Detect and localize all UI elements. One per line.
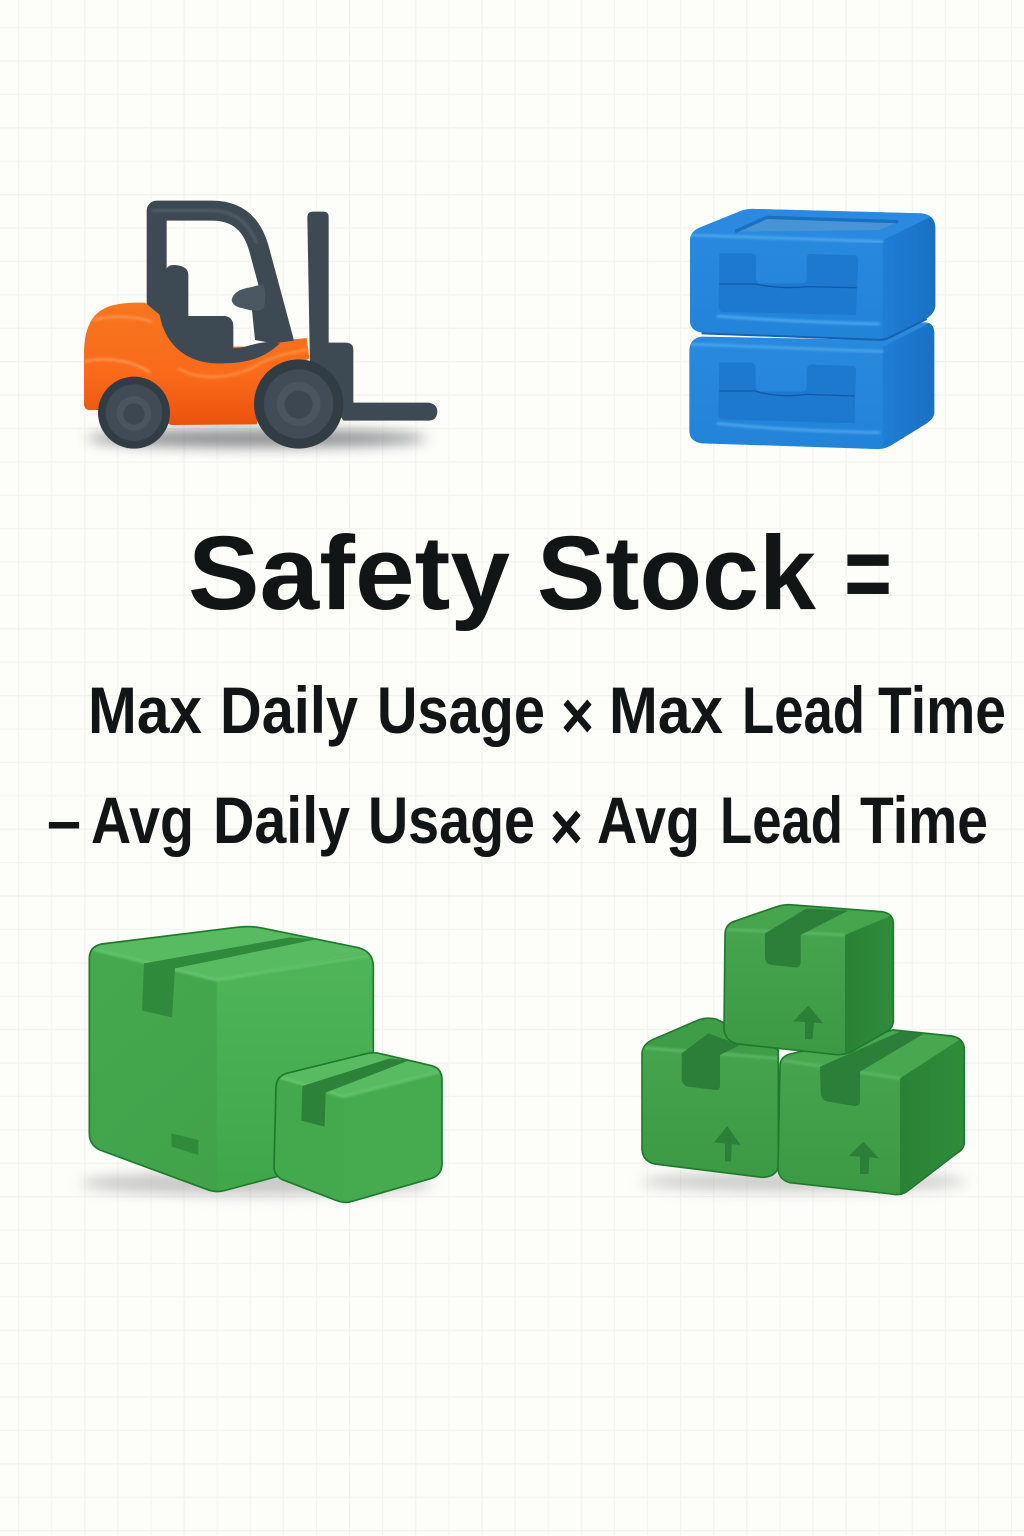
box shadow: [80, 1171, 433, 1195]
forklift orange body: [84, 303, 309, 425]
formula line 2: [47, 783, 988, 863]
forklift mast and fork: [307, 212, 437, 421]
formula line 1: Usage: [377, 673, 545, 747]
heading: Safety Stock =: [188, 515, 892, 632]
formula line 2: Daily: [213, 783, 350, 857]
heading: Safety Stock =: Stock: [537, 515, 817, 632]
forklift seat: [159, 265, 280, 363]
formula line 2: Lead: [720, 783, 843, 857]
icon: large and small green boxes: [80, 923, 443, 1207]
icon: forklift: [84, 211, 437, 449]
forklift front wheel: [254, 359, 343, 449]
formula line 2: Time: [860, 783, 988, 857]
formula line 2: Usage: [368, 783, 535, 857]
large box: [87, 923, 377, 1200]
shadow: [640, 1172, 967, 1192]
upper drawer unit: [690, 207, 937, 347]
formula line 2: Avg: [597, 783, 700, 857]
formula line 1: Daily: [220, 673, 358, 747]
left box: [640, 1017, 783, 1177]
formula line 1: ×: [561, 678, 594, 752]
forklift ground shadow: [87, 430, 427, 447]
formula line 1: Lead: [742, 673, 865, 747]
formula line 2: –: [47, 783, 81, 857]
lower drawer unit: [689, 321, 934, 453]
icon: blue stacked drawers: [689, 207, 937, 453]
forklift cab frame: [152, 211, 284, 342]
seam between drawers: [702, 319, 927, 340]
right box: [777, 1028, 967, 1200]
formula line 1: [88, 673, 1006, 752]
formula line 2: Avg: [91, 783, 194, 857]
heading: Safety Stock =: =: [844, 515, 892, 632]
top box: [723, 903, 895, 1057]
icon: pyramid of green boxes: [640, 903, 967, 1200]
forklift steering wheel: [232, 283, 294, 343]
small box: [273, 1050, 443, 1207]
heading: Safety Stock =: Safety: [188, 515, 510, 632]
formula line 2: ×: [550, 789, 583, 863]
forklift rear wheel: [98, 377, 170, 449]
formula line 1: Max: [88, 673, 202, 747]
formula line 1: Max: [609, 673, 723, 747]
